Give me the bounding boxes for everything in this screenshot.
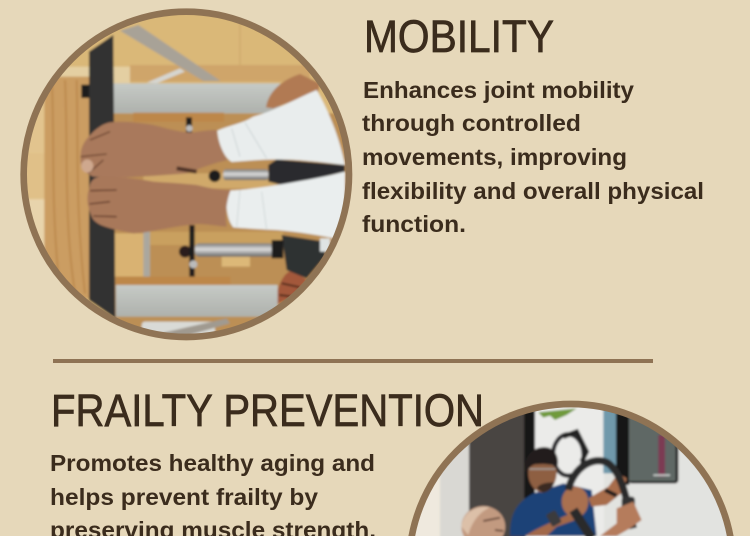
pilates ring: [568, 461, 633, 528]
panel: mobility photo circle: [20, 7, 353, 343]
text block: mobility description: [362, 77, 704, 237]
springs: [223, 169, 268, 180]
trainer torso: [510, 483, 597, 536]
text block: mobility description: movements, improving: [362, 144, 627, 170]
plant: [538, 408, 577, 420]
hands at edge: [266, 74, 320, 108]
heading: mobility: MOBILITY: [364, 11, 554, 62]
text block: frailty prevention description: [50, 450, 376, 536]
shorts: [268, 159, 345, 186]
legging: lower: [226, 172, 345, 241]
divider: [53, 359, 653, 363]
client head: [461, 506, 505, 536]
pole: [89, 35, 115, 318]
text block: mobility description: Enhances joint mobility: [363, 77, 634, 103]
text block: frailty prevention description: Promotes healthy aging and: [50, 450, 375, 476]
trainer arms: [525, 510, 587, 536]
text block: frailty prevention description: helps prevent frailty by: [50, 484, 318, 510]
text block: mobility description: function.: [362, 211, 466, 237]
foot: lower: [87, 177, 231, 233]
wall ring: [553, 434, 584, 476]
client hand: [600, 502, 642, 536]
upper strut and bar: [147, 68, 185, 83]
trainer head: [528, 463, 557, 493]
panel: frailty prevention photo circle: [408, 400, 734, 536]
heading: frailty prevention: FRAILTY PREVENTION: [51, 385, 484, 436]
wood panel: [44, 77, 90, 298]
text block: mobility description: through controlled: [362, 110, 581, 136]
text block: mobility description: flexibility and overall physical: [362, 178, 704, 204]
legging: upper: [217, 90, 345, 165]
foot: upper: [80, 122, 227, 177]
lower bar: [116, 277, 230, 286]
